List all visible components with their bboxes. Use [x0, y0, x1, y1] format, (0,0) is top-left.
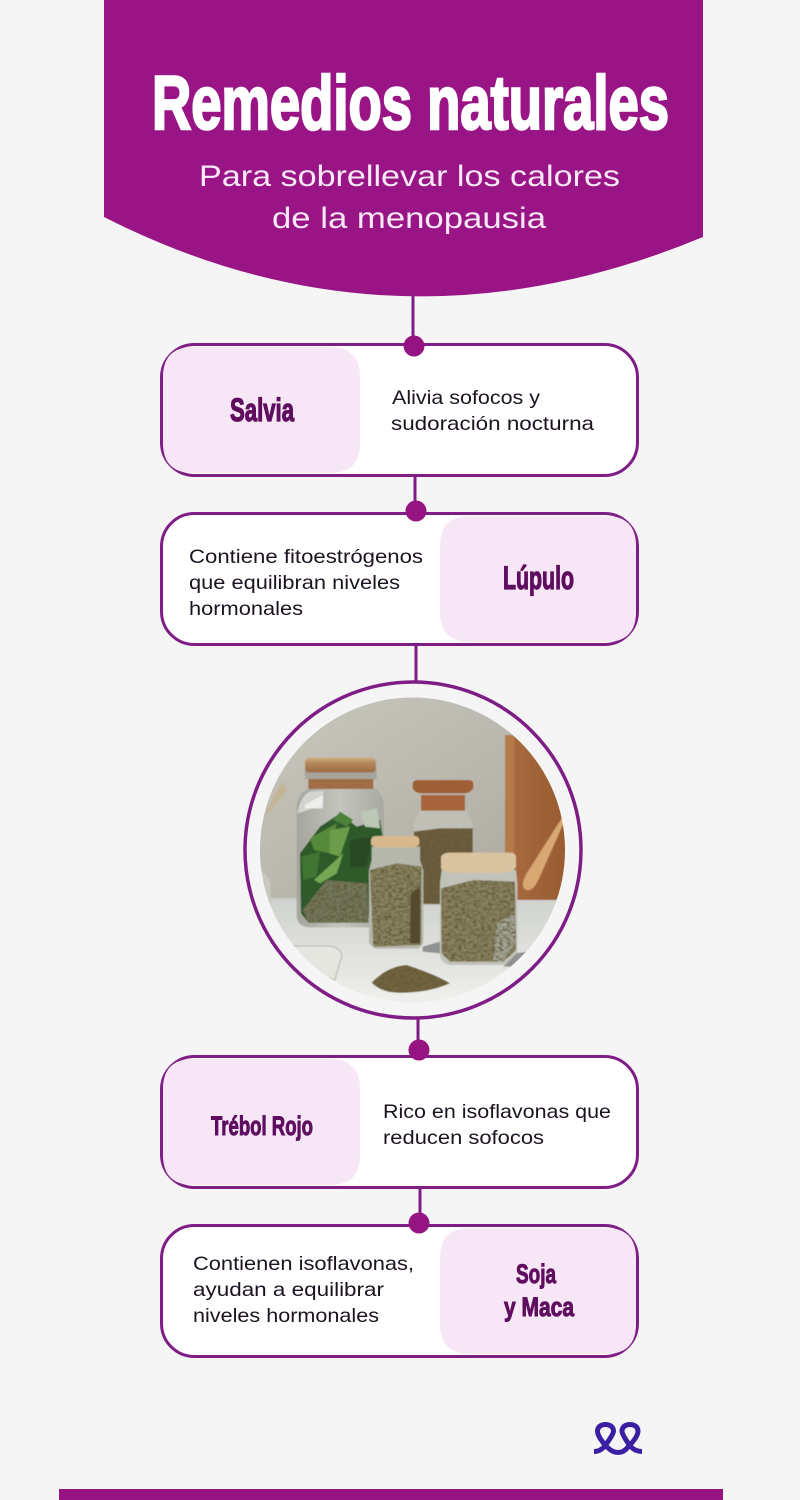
label: Soja y Maca	[504, 1259, 575, 1322]
description: Salvia: sudoración nocturna	[391, 413, 594, 435]
label: Salvia: Salvia	[230, 392, 294, 428]
subtitle: de la menopausia	[272, 202, 546, 235]
label: Lúpulo: Lúpulo	[503, 560, 574, 596]
panel: Salvia	[162, 344, 638, 476]
connector dot: Trébol Rojo top	[408, 1040, 430, 1060]
connector: photo to Trébol Rojo	[416, 1018, 420, 1052]
photo: herb jars	[253, 693, 573, 1005]
icon: brand logo loops	[594, 1424, 642, 1452]
description: Soja y Maca: niveles hormonales	[193, 1305, 379, 1327]
small jar	[369, 836, 423, 949]
panel: Trébol Rojo	[162, 1056, 638, 1188]
front jar	[440, 853, 517, 965]
description: Lúpulo	[189, 546, 423, 620]
panel: Soja y Maca	[162, 1226, 638, 1356]
description: Salvia	[391, 387, 594, 435]
herb pile	[372, 965, 450, 993]
connector: Salvia to Lúpulo	[414, 476, 416, 506]
connector: Lúpulo to photo	[414, 645, 418, 683]
panel: Lúpulo	[162, 514, 638, 644]
description: Soja y Maca	[193, 1253, 414, 1327]
large jar with leaves	[297, 758, 384, 927]
description: Lúpulo: hormonales	[189, 598, 303, 620]
wooden board	[505, 735, 568, 900]
jar shadows	[423, 942, 527, 967]
connector dot: Salvia top	[404, 336, 424, 356]
description: Trébol Rojo: Rico en isoflavonas que	[383, 1101, 611, 1123]
description: Trébol Rojo: reducen sofocos	[383, 1127, 544, 1149]
label: Soja y Maca: y Maca	[504, 1292, 575, 1322]
description: Lúpulo: Contiene fitoestrógenos	[189, 546, 423, 568]
glass bowl	[293, 946, 342, 980]
description: Salvia: Alivia sofocos y	[392, 387, 540, 409]
dried sprig and left bottle	[261, 782, 287, 903]
footer bar	[59, 1489, 723, 1500]
back jar	[413, 780, 473, 905]
photo ring	[245, 682, 581, 1018]
header banner	[104, 0, 703, 296]
description: Lúpulo: que equilibran niveles	[189, 572, 400, 594]
connector dot: Lúpulo top	[406, 500, 426, 522]
connector: Trébol Rojo to Soja y Maca	[418, 1188, 422, 1218]
description: Soja y Maca: ayudan a equilibrar	[193, 1279, 385, 1301]
subtitle	[199, 160, 620, 235]
description: Trébol Rojo	[383, 1101, 611, 1149]
subtitle: Para sobrellevar los calores	[199, 160, 620, 193]
description: Soja y Maca: Contienen isoflavonas,	[193, 1253, 414, 1275]
connector: header to Salvia	[412, 295, 414, 345]
label: Soja y Maca: Soja	[516, 1259, 557, 1289]
connector dot: Soja y Maca top	[408, 1212, 430, 1234]
label: Trébol Rojo: Trébol Rojo	[211, 1111, 313, 1141]
